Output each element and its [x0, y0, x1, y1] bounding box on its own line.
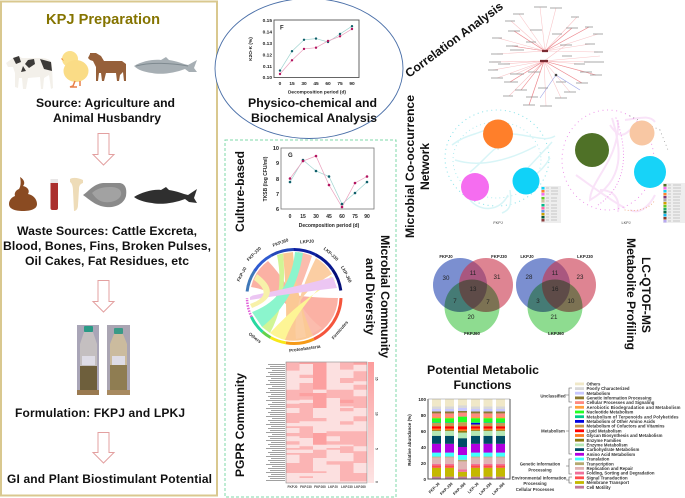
- icon: excreta: [9, 177, 37, 211]
- legend: metabolic functions: Unclassified: [540, 394, 566, 398]
- legend: FKPJ: [541, 186, 561, 223]
- heading: microbial community and diversity: and Diversity: [363, 258, 377, 335]
- line chart F: 90: [349, 81, 355, 87]
- venn: FKPJ: 11: [470, 270, 477, 277]
- node cluster: cyan: [634, 156, 666, 188]
- icon: bone: [70, 178, 83, 211]
- line chart F: Decomposition period (d): [288, 90, 346, 96]
- panel: physico-chemical analysis: [215, 0, 403, 138]
- line chart G: 0: [289, 214, 292, 220]
- heading: culture-based: Culture-based: [233, 151, 247, 232]
- legend: metabolic functions: Metabolism of Cofactors and Vitamins: [586, 424, 665, 429]
- line chart F: 0.10: [263, 75, 272, 81]
- legend: metabolic functions: Environmental Information: [512, 476, 567, 480]
- line chart G: 9: [276, 161, 279, 167]
- stacked bar chart: 0: [423, 477, 426, 482]
- heatmap: FKPJ60: [314, 485, 326, 489]
- venn: FKPJ: 20: [468, 314, 475, 321]
- node cluster: orange: [483, 120, 513, 148]
- heading: KPJ Preparation: KPJ Preparation: [46, 12, 160, 28]
- venn: LKPJ: 28: [526, 274, 533, 281]
- line chart F: 60: [325, 81, 331, 87]
- line chart F: 30: [301, 81, 307, 87]
- panel: KPJ preparation: [1, 2, 217, 496]
- text: GI potential: GI and Plant Biostimulant Potential: [7, 472, 212, 486]
- legend: metabolic functions: Cell Motility: [586, 485, 611, 490]
- legend: metabolic functions: Metabolism of Terpenoids and Polyketides: [586, 414, 679, 419]
- venn: FKPJ: 31: [494, 274, 501, 281]
- line chart G: [263, 146, 374, 229]
- venn: LKPJ: LKPJ0: [520, 254, 534, 259]
- legend: metabolic functions: Glycan Biosynthesis and Metabolism: [586, 433, 663, 438]
- icon: blood tube: [50, 179, 58, 210]
- icon: meat: [83, 183, 126, 207]
- heading: microbial community and diversity: Microbial Community: [378, 235, 392, 358]
- stacked bar chart: [407, 397, 510, 496]
- heading: biochemical analysis: Biochemical Analysis: [251, 111, 377, 125]
- heatmap: LKPJ0: [328, 485, 338, 489]
- chord diagram: [236, 237, 353, 353]
- legend: metabolic functions: Metabolism: [586, 391, 610, 396]
- chord diagram: FKP-J30: [246, 245, 262, 262]
- line chart G: 6: [276, 207, 279, 213]
- legend: metabolic functions: Cellular Processes and Signaling: [586, 400, 655, 405]
- label: FKPJ: FKPJ: [493, 221, 503, 225]
- stacked bar chart: LKP-J60: [491, 481, 506, 496]
- legend: metabolic functions: Enzyme Metabolism: [586, 442, 628, 448]
- photo: LKPJ bottle: [107, 325, 130, 395]
- line chart G: 75: [352, 214, 358, 220]
- chord diagram: FKPJ60: [272, 237, 290, 248]
- text: waste sources: Oil Cakes, Fat Residues, etc: [25, 254, 189, 268]
- venn: FKPJ: 7: [453, 298, 457, 305]
- heatmap: FKPJ0: [288, 485, 298, 489]
- node cluster: magenta: [461, 173, 489, 201]
- line chart F: 0.14: [263, 30, 272, 36]
- heading: microbial community and diversity: [363, 235, 392, 358]
- venn: FKPJ: 7: [486, 299, 490, 306]
- heatmap: 10: [374, 412, 378, 416]
- heatmap: LKPJ30: [341, 485, 353, 489]
- heatmap: 15: [374, 377, 378, 381]
- legend: metabolic functions: Poorly Characterized: [586, 386, 630, 391]
- venn: FKPJ: 13: [470, 286, 477, 293]
- line chart F: 0.11: [263, 64, 272, 70]
- legend: metabolic functions: Signal Transduction: [586, 475, 628, 480]
- heatmap: [266, 362, 378, 489]
- legend: metabolic functions: Transcription: [586, 461, 614, 466]
- chord diagram: Others: [248, 331, 263, 345]
- arrow 3: [93, 432, 114, 463]
- line chart F: F: [280, 26, 284, 32]
- legend: metabolic functions: Others: [586, 382, 601, 386]
- line chart F: [248, 18, 359, 96]
- venn: LKPJ: 3: [536, 298, 540, 305]
- correlation network: [488, 7, 604, 106]
- line chart G: 10: [273, 146, 279, 152]
- stacked bar chart: LKP-J0: [466, 481, 480, 494]
- node cluster: dark green: [575, 133, 609, 167]
- icon: goat: [88, 53, 126, 81]
- venn: LKPJ: 23: [577, 274, 584, 281]
- legend: metabolic functions: Genetic Information Processing: [586, 396, 652, 400]
- legend: metabolic functions: Aerobiotic Biodegradation and Metabolism: [586, 405, 681, 410]
- legend: metabolic functions: Lipid Metabolism: [586, 428, 622, 433]
- chord diagram: Proteobacteria: [289, 344, 321, 353]
- arrow 2: [93, 280, 114, 312]
- text: waste sources: [3, 224, 211, 268]
- heatmap: 5: [374, 448, 378, 450]
- legend: metabolic functions: Processing: [528, 468, 552, 472]
- legend: metabolic functions: Metabolism of Other Amino Acids: [586, 419, 656, 424]
- venn: LKPJ: LKPJ60: [548, 331, 564, 336]
- label: LKPJ: LKPJ: [621, 221, 631, 225]
- text: waste sources: Blood, Bones, Fins, Broken Pulses,: [3, 239, 211, 253]
- line chart G: Decomposition period (d): [299, 223, 360, 229]
- stacked bar chart: 100: [418, 397, 426, 402]
- legend: metabolic functions: Membrane Transport: [586, 480, 630, 485]
- legend: metabolic functions: Amino Acid Metabolism: [586, 452, 635, 457]
- heading: microbial co-occurrence network: Network: [418, 143, 432, 190]
- white gap: [315, 289, 345, 298]
- stacked bar chart: 20: [421, 461, 426, 466]
- heading: LC-QTOF-MS metabolite profiling: [624, 238, 653, 350]
- icon: fish: [134, 57, 197, 74]
- legend: LKPJ: [663, 183, 685, 223]
- legend: metabolic functions: Genetic Information: [520, 462, 561, 466]
- venn: FKPJ: FKPJ0: [439, 254, 453, 259]
- venn: LKPJ: 10: [568, 298, 575, 305]
- line chart G: 15: [300, 214, 306, 220]
- heading: physico-chemical: Physico-chemical and: [248, 96, 377, 110]
- line chart F: 45: [313, 81, 319, 87]
- panel: microbial community: [225, 140, 396, 497]
- venn: LKPJ: LKPJ30: [577, 254, 593, 259]
- stacked bar chart: 40: [421, 445, 426, 450]
- line chart F: 0.12: [263, 52, 272, 58]
- legend: metabolic functions: Nucleotide Metabolism: [586, 410, 633, 415]
- line chart G: 7: [276, 192, 279, 198]
- legend: metabolic functions: Translation: [586, 457, 610, 462]
- stacked bar chart: LKP-J30: [478, 481, 493, 496]
- stacked bar chart: Relative abundance (%): [407, 414, 412, 466]
- chord diagram: FKP-J0: [236, 266, 248, 282]
- heatmap: FKPJ30: [300, 485, 312, 489]
- line chart F: K2O-K (%): [248, 37, 254, 61]
- heading: LC-QTOF-MS metabolite profiling: Metabolite Profiling: [624, 238, 638, 350]
- stacked bar chart: 60: [421, 429, 426, 434]
- venn: FKPJ: 30: [443, 275, 450, 282]
- venn: FKPJ: [433, 254, 513, 336]
- heading: microbial co-occurrence network: [403, 95, 432, 238]
- text: waste sources: Waste Sources: Cattle Excreta,: [17, 224, 197, 238]
- line chart G: G: [288, 153, 293, 159]
- heading: potential metabolic functions: [427, 363, 539, 392]
- venn: LKPJ: 16: [552, 286, 559, 293]
- node cluster: cyan: [512, 168, 540, 194]
- line chart G: 45: [326, 214, 332, 220]
- arrow 1: [93, 134, 114, 165]
- icon: cow: [6, 56, 53, 89]
- stacked bar chart: 80: [421, 413, 426, 418]
- venn: LKPJ: 11: [552, 270, 559, 277]
- heatmap: LKPJ60: [354, 485, 366, 489]
- chord diagram: LKP-J60: [340, 265, 353, 284]
- node cluster: peach: [630, 120, 654, 146]
- line chart F: 0: [279, 81, 282, 87]
- legend: metabolic functions: Cellular Processes: [516, 487, 555, 492]
- line chart G: 60: [339, 214, 345, 220]
- line chart F: 0.15: [263, 18, 272, 24]
- venn: LKPJ: 21: [551, 314, 558, 321]
- line chart G: 90: [364, 214, 370, 220]
- legend: metabolic functions: [512, 382, 681, 492]
- legend: metabolic functions: Enzyme Families: [586, 438, 622, 443]
- heading: potential metabolic functions: Potential Metabolic: [427, 363, 539, 377]
- chord diagram: Firmicutes: [331, 319, 349, 340]
- network: LKPJ: [562, 110, 685, 225]
- legend: metabolic functions: Replication and Repair: [586, 466, 633, 471]
- heatmap: 0: [374, 481, 378, 483]
- venn: LKPJ: [516, 254, 596, 336]
- legend: metabolic functions: Processing: [523, 481, 547, 486]
- legend: metabolic functions: Folding, Sorting and Degradation: [586, 471, 655, 476]
- stacked bar chart: FKP-J30: [439, 481, 454, 496]
- stacked bar chart: FKP-J60: [452, 481, 467, 496]
- line chart F: 0.13: [263, 41, 272, 47]
- text: formulation: Formulation: FKPJ and LPKJ: [15, 406, 185, 420]
- line chart F: 15: [289, 81, 295, 87]
- heading: microbial co-occurrence network: Microbial Co-occurrence: [403, 95, 417, 238]
- text: source: Source: Agriculture and: [36, 96, 175, 110]
- heading: LC-QTOF-MS metabolite profiling: LC-QTOF-MS: [639, 257, 653, 333]
- chord diagram: LKPJ0: [300, 239, 315, 244]
- venn: FKPJ: FKPJ60: [464, 331, 480, 336]
- stacked bar chart: FKP-J0: [427, 481, 441, 494]
- heading: correlation analysis: Correlation Analysis: [402, 0, 506, 80]
- icon: dark fish: [134, 187, 197, 204]
- network: FKPJ: [445, 110, 561, 225]
- text: animal husbandry: Animal Husbandry: [53, 111, 161, 125]
- legend: metabolic functions: Metabolism: [541, 428, 565, 434]
- chord diagram: LKP-J30: [323, 246, 340, 262]
- line chart G: TKSB (log CFU/ml): [263, 156, 269, 201]
- line chart G: 8: [276, 177, 279, 183]
- legend: metabolic functions: Carbohydrate Metabolism: [586, 447, 639, 452]
- heading: PGPR community: PGPR Community: [233, 373, 247, 477]
- line chart F: 75: [337, 81, 343, 87]
- icon: chick: [61, 51, 88, 87]
- photo: FKPJ bottle: [77, 325, 99, 395]
- heading: potential metabolic functions: Functions: [454, 378, 512, 392]
- venn: FKPJ: FKPJ30: [491, 254, 507, 259]
- line chart G: 30: [313, 214, 319, 220]
